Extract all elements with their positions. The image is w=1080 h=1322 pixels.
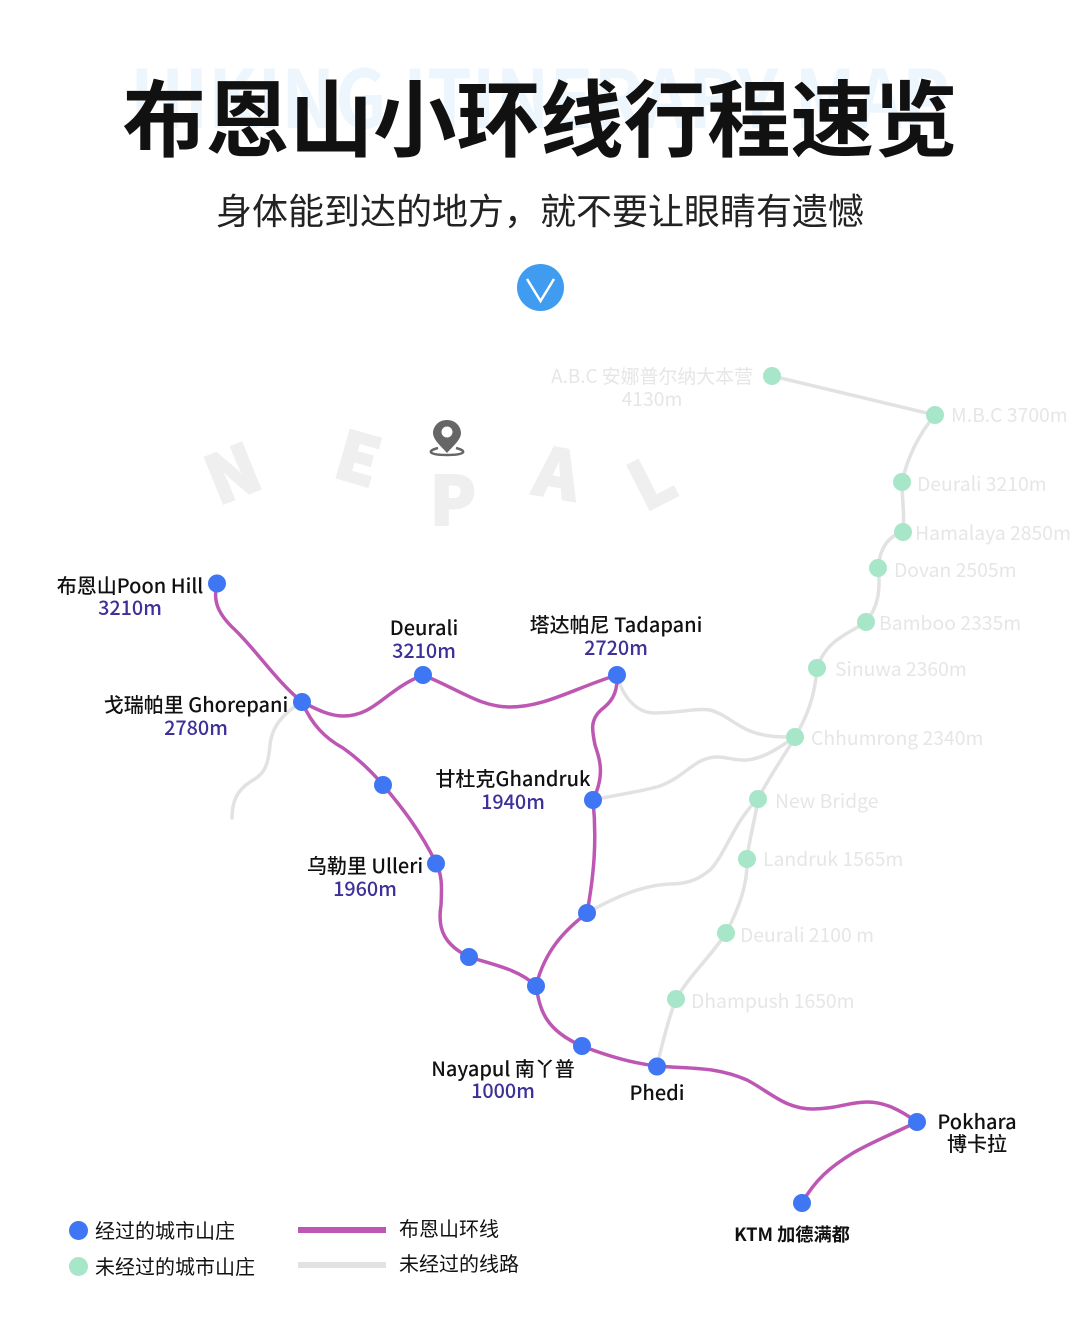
labels: visited stops: Pokhara — [937, 1106, 1017, 1135]
watermark: NEPAL: A — [527, 418, 589, 521]
labels: visited stops: 1960m — [333, 873, 397, 902]
legend: 未经过的城市山庄 — [95, 1251, 255, 1280]
watermark: NEPAL: E — [326, 402, 393, 507]
watermark: NEPAL: N — [189, 415, 273, 524]
icon: location pin — [431, 420, 463, 455]
labels: unvisited stops: 4130m — [622, 384, 682, 412]
legend: 布恩山环线 — [399, 1213, 499, 1242]
labels: unvisited stops: Chhumrong 2340m — [811, 723, 983, 751]
labels: unvisited stops: Hamalaya 2850m — [915, 518, 1071, 546]
labels: visited stops: Nayapul 南丫普 — [431, 1053, 575, 1082]
ghost english title: HIKING ITINERARY MAP — [130, 36, 950, 152]
labels: visited stops: 3210m — [98, 592, 162, 621]
labels: visited stops: 2720m — [584, 632, 648, 661]
labels: visited stops: Deurali — [390, 612, 458, 641]
watermark: NEPAL — [189, 402, 690, 545]
labels: visited stops: 乌勒里 Ulleri — [307, 850, 423, 879]
labels: unvisited stops: Dovan 2505m — [894, 555, 1016, 583]
legend: 经过的城市山庄 — [95, 1215, 235, 1244]
labels: unvisited stops: M.B.C 3700m — [951, 400, 1068, 428]
labels: visited stops: 2780m — [164, 712, 228, 741]
labels: visited stops: 1000m — [471, 1075, 535, 1104]
labels: visited stops — [57, 570, 1017, 1247]
legend: 未经过的线路 — [399, 1248, 519, 1277]
labels: unvisited stops: Sinuwa 2360m — [835, 654, 967, 682]
labels: unvisited stops: Deurali 3210m — [917, 469, 1047, 497]
labels: visited stops: 1940m — [481, 786, 545, 815]
labels: visited stops: 博卡拉 — [947, 1128, 1007, 1157]
labels: visited stops: 戈瑞帕里 Ghorepani — [104, 689, 288, 718]
labels: unvisited stops: Landruk 1565m — [763, 844, 903, 872]
stops: not visited — [667, 367, 944, 1008]
Poon Hill circuit (purple) — [216, 583, 917, 1203]
labels: unvisited stops: A.B.C 安娜普尔纳大本营 — [551, 362, 753, 389]
labels: visited stops: 3210m — [392, 635, 456, 664]
labels: unvisited stops: New Bridge — [775, 786, 879, 814]
labels: visited stops: Phedi — [629, 1077, 685, 1106]
labels: visited stops: 甘杜克Ghandruk — [435, 763, 591, 792]
watermark: NEPAL: P — [430, 448, 476, 545]
legend — [69, 1213, 519, 1280]
labels: visited stops: KTM 加德满都 — [734, 1221, 850, 1247]
subtitle: 身体能到达的地方，就不要让眼睛有遗憾 — [216, 183, 864, 235]
labels: unvisited stops: Dhampush 1650m — [691, 986, 855, 1014]
unvisited routes (grey) — [232, 376, 935, 1066]
labels: unvisited stops — [551, 362, 1071, 1014]
stops: visited — [208, 574, 926, 1212]
icon: down chevron — [517, 264, 564, 311]
labels: visited stops: 布恩山Poon Hill — [57, 570, 203, 599]
watermark: NEPAL: L — [610, 426, 690, 530]
title: 布恩山小环线行程速览 — [122, 54, 958, 175]
labels: unvisited stops: Deurali 2100 m — [740, 920, 874, 948]
labels: unvisited stops: Bamboo 2335m — [879, 608, 1021, 636]
labels: visited stops: 塔达帕尼 Tadapani — [530, 609, 702, 638]
